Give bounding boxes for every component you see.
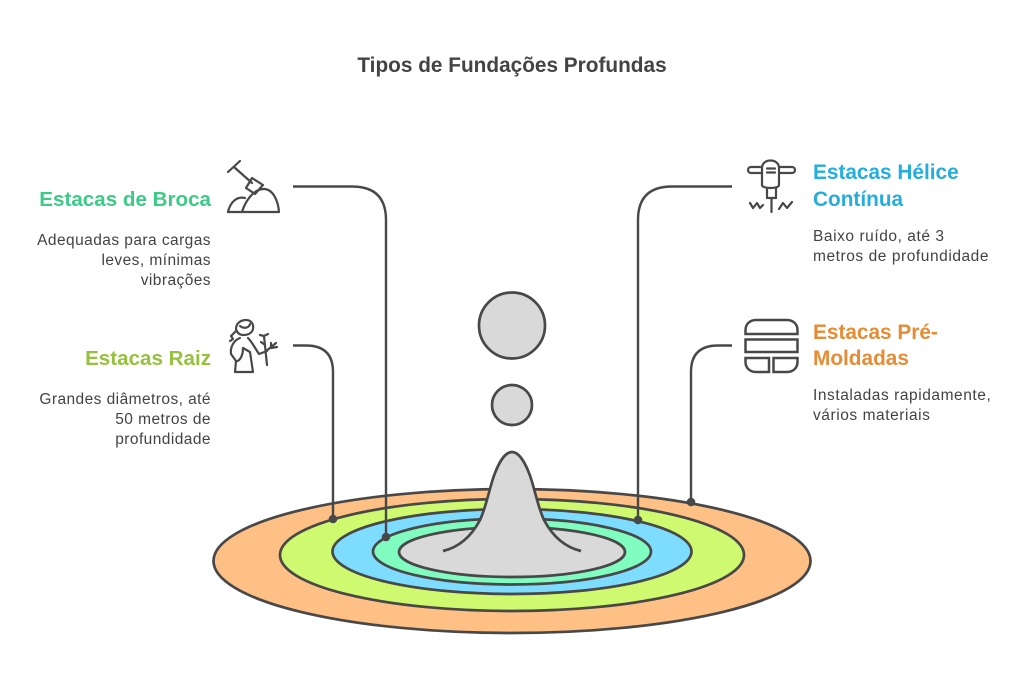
block: Estacas Hélice Contínua [813,161,989,265]
text: Estacas Hélice Contínua description [813,228,989,265]
ring: lime [280,499,744,611]
ring: green [373,518,651,584]
text: Estacas Pré-Moldadas description [813,387,991,424]
ring: orange [214,489,810,633]
heading: Estacas Pré-Moldadas: Estacas Pré- [813,320,938,344]
text: Estacas Raiz description [39,391,211,448]
text: Estacas Hélice Contínua description: metros de profundidade [813,248,989,265]
heading: Estacas Hélice Contínua: Estacas Hélice [813,161,959,184]
heading: Estacas Pré-Moldadas: Moldadas [813,347,909,370]
connector: Estacas de Broca [293,186,390,541]
text: Estacas Raiz description: 50 metros de [115,411,211,428]
peak [443,452,581,559]
ring: grey centre [399,527,625,577]
connector: Estacas Pré-Moldadas [687,346,732,506]
text: Estacas de Broca description: Adequadas para cargas [37,232,211,249]
small droplet [492,385,532,425]
block: Estacas Raiz [39,347,211,448]
text: Estacas de Broca description: vibrações [141,272,211,289]
text: Estacas Raiz description: profundidade [115,431,211,448]
heading: Estacas Hélice Contínua [813,161,959,210]
connector: Estacas Raiz [293,346,337,523]
text: Estacas de Broca description [37,232,211,289]
heading: Estacas Pré-Moldadas [813,320,938,370]
heading: Estacas Hélice Contínua: Contínua [813,188,903,210]
heading: Estacas Raiz: Estacas Raiz [85,347,211,370]
icon: jackhammer [748,160,795,212]
text: Estacas Hélice Contínua description: Baixo ruído, até 3 [813,228,945,245]
ring: blue [332,509,692,594]
text: Estacas de Broca description: leves, mínimas [101,252,211,269]
text: Estacas Pré-Moldadas description: vários materiais [813,407,930,424]
block: Estacas de Broca [37,188,212,289]
title: Tipos de Fundações Profundas [357,54,667,77]
icon: shovel and mound [228,161,279,212]
icon: stacked blocks [746,320,798,372]
icon: person with plant [230,320,277,372]
block: Estacas Pré-Moldadas [813,320,991,424]
heading: Estacas de Broca: Estacas de Broca [39,188,211,211]
large droplet [479,292,545,358]
peak outline [443,452,581,551]
text: Estacas Pré-Moldadas description: Instaladas rapidamente, [813,387,991,404]
text: Estacas Raiz description: Grandes diâmetros, até [39,391,211,408]
connector: Estacas Hélice Contínua [634,186,732,524]
